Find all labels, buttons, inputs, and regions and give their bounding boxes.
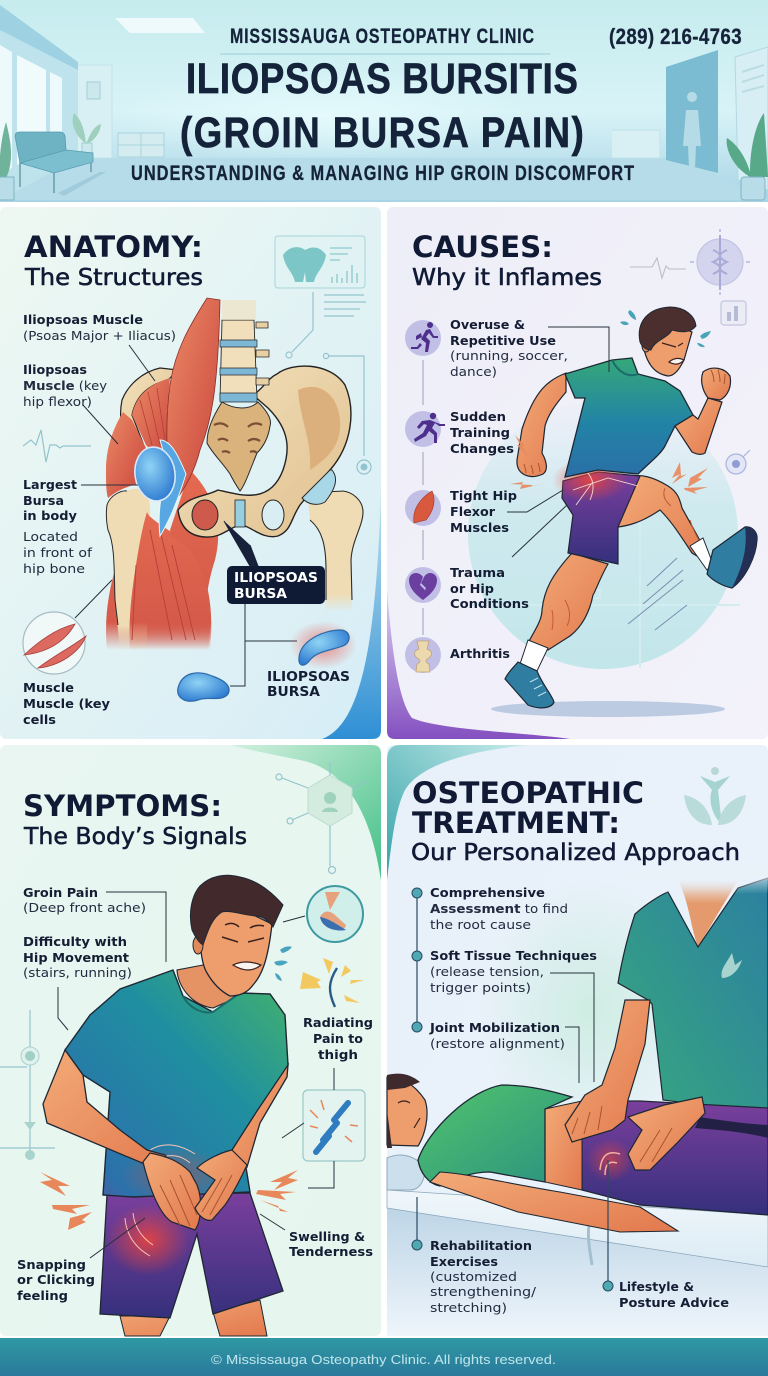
label: sudden training: Training <box>450 425 510 440</box>
illustration: treatment table <box>387 1155 768 1336</box>
label: muscle cells: Muscle (key <box>23 696 110 711</box>
label: iliopsoas muscle <box>23 312 176 343</box>
label: overuse: dance) <box>450 364 497 379</box>
label: muscle cells <box>23 680 110 727</box>
hand left <box>143 1153 201 1230</box>
label: muscle cells: Muscle <box>23 680 74 695</box>
icon: joint <box>414 641 432 672</box>
heading: causes <box>412 230 602 291</box>
label: rehabilitation: Rehabilitation <box>430 1238 532 1253</box>
icon: foot circle <box>283 886 363 942</box>
heading: anatomy <box>24 230 203 291</box>
label: rehabilitation: strengthening/ <box>430 1284 537 1299</box>
subtitle: UNDERSTANDING & MANAGING HIP GROIN DISCOMFORT <box>131 161 635 184</box>
heading: treatment <box>411 776 740 866</box>
label: soft tissue: (release tension, <box>430 964 544 979</box>
icon: bursa small <box>178 673 229 701</box>
label: radiating pain: Pain to <box>313 1031 363 1046</box>
label: radiating pain: Radiating <box>303 1015 373 1030</box>
label: soft tissue: trigger points) <box>430 980 531 995</box>
heading: symptoms <box>23 789 247 850</box>
heading: treatment: OSTEOPATHIC <box>412 776 644 810</box>
shorts <box>100 1193 283 1318</box>
shirt <box>65 970 288 1197</box>
label: tight hip flexor <box>450 488 517 535</box>
therapist second hand <box>628 1097 705 1170</box>
treatment timeline and callouts <box>412 888 613 1291</box>
title: (GROIN BURSA PAIN) <box>180 109 584 157</box>
left ilium rim <box>121 368 178 455</box>
icon: joint box <box>303 1090 365 1161</box>
label: soft tissue: Soft Tissue Techniques <box>430 948 597 963</box>
label: hip movement: Difficulty with <box>23 934 127 949</box>
wall cabinet and picture <box>87 82 164 157</box>
causes callouts <box>507 327 609 557</box>
label: rehabilitation: stretching) <box>430 1300 507 1315</box>
panel: treatment <box>387 745 768 1336</box>
label: sudden training: Changes <box>450 441 514 456</box>
label: swelling: Swelling & <box>289 1229 365 1244</box>
back leg <box>528 553 608 650</box>
label: lifestyle: Lifestyle & <box>619 1279 694 1294</box>
clinic name: MISSISSAUGA OSTEOPATHY CLINIC <box>230 24 534 48</box>
label: iliopsoas muscle: Iliopsoas Muscle <box>23 312 143 327</box>
illustration: man in pain <box>40 875 298 1336</box>
label: largest bursa: Bursa <box>23 493 64 508</box>
pelvis <box>178 366 351 537</box>
neck <box>177 965 253 1008</box>
icon: chart <box>721 301 746 325</box>
callout: iliopsoas bursa: ILIOPSOAS <box>234 571 318 586</box>
label: iliopsoas bursa: ILIOPSOAS <box>267 670 350 685</box>
illustration: patient <box>387 1000 768 1232</box>
muscle lines <box>129 345 155 381</box>
panel: symptoms <box>0 745 381 1336</box>
label: assessment: Assessment to find <box>430 901 568 916</box>
label: groin pain <box>23 885 146 915</box>
label: swelling <box>289 1229 373 1259</box>
label: snapping: or Clicking <box>17 1272 95 1287</box>
back arm <box>517 373 566 476</box>
left femur <box>106 489 150 650</box>
icon: radiating pain <box>300 958 364 1007</box>
bursa <box>159 440 186 536</box>
title: ILIOPSOAS BURSITIS <box>186 55 578 103</box>
icon column: causes <box>405 320 445 673</box>
label: soft tissue <box>430 948 597 995</box>
label: overuse: Repetitive Use <box>450 333 556 348</box>
panel: header clinic background <box>0 0 768 202</box>
label: lifestyle: Posture Advice <box>619 1295 729 1310</box>
label: trauma <box>450 565 529 611</box>
heading: treatment: TREATMENT: <box>412 806 620 840</box>
label: rehabilitation: (customized <box>430 1269 517 1284</box>
arm left <box>43 1050 175 1170</box>
iliacus <box>132 378 170 470</box>
label: largest bursa: Located <box>23 529 78 544</box>
therapist arm and hand <box>565 1000 650 1142</box>
label: sudden training <box>450 409 514 456</box>
label: snapping: Snapping <box>17 1257 86 1272</box>
label: hip movement: (stairs, running) <box>23 965 132 980</box>
header rule <box>220 53 550 55</box>
label: assessment <box>430 885 568 932</box>
label: assessment: the root cause <box>430 917 531 932</box>
label: snapping <box>17 1257 95 1303</box>
footer: © Mississauga Osteopathy Clinic. All rights reserved. <box>211 1352 556 1367</box>
label: hip flexor: Iliopsoas <box>23 362 87 377</box>
label: trauma: or Hip <box>450 581 494 596</box>
head <box>643 320 692 376</box>
arm right <box>232 1065 288 1167</box>
label: largest bursa: in front of <box>23 545 93 560</box>
label: rehabilitation <box>430 1238 537 1315</box>
label: iliopsoas bursa: BURSA <box>267 685 320 700</box>
icon: caduceus emblem <box>690 229 750 295</box>
phone number: (289) 216-4763 <box>609 26 742 49</box>
label: hip flexor: Muscle (key <box>23 378 108 393</box>
label: sudden training: Sudden <box>450 409 506 424</box>
bolts <box>40 1170 298 1230</box>
label: joint mobilization: Joint Mobilization <box>429 1020 560 1035</box>
label: swelling: Tenderness <box>289 1244 373 1259</box>
label: arthritis: Arthritis <box>450 646 510 661</box>
label: radiating pain: thigh <box>318 1047 358 1062</box>
illustration: anatomy <box>75 298 363 686</box>
footer <box>0 1338 768 1376</box>
bolts <box>510 435 708 494</box>
title <box>180 55 584 157</box>
label: hip flexor <box>23 362 108 409</box>
label: largest bursa: hip bone <box>23 561 85 576</box>
icon: target <box>726 450 750 474</box>
panel: anatomy <box>0 207 381 739</box>
label: groin pain: (Deep front ache) <box>23 900 146 915</box>
hand right <box>195 1150 247 1220</box>
spine <box>220 320 257 400</box>
label: iliopsoas muscle: (Psoas Major + Iliacus) <box>23 328 176 343</box>
label: joint mobilization <box>429 1020 565 1051</box>
head <box>200 905 272 996</box>
panel: causes <box>387 207 768 739</box>
label: assessment: Comprehensive <box>430 885 545 900</box>
icon: runner <box>411 322 438 352</box>
label: tight hip flexor: Flexor <box>450 504 496 519</box>
heading: causes: Why it Inflames <box>412 265 602 291</box>
icon: muscle <box>414 491 434 523</box>
label: hip movement: Hip Movement <box>23 950 129 965</box>
label: overuse: (running, soccer, <box>450 348 568 363</box>
icon: pelvis monitor <box>275 236 365 288</box>
label: trauma: Trauma <box>450 565 505 580</box>
label: groin pain: Groin Pain <box>23 885 98 900</box>
label: tight hip flexor: Muscles <box>450 520 509 535</box>
label: hip movement <box>23 934 132 980</box>
psoas band <box>167 298 220 503</box>
heading: symptoms: The Body’s Signals <box>23 824 247 850</box>
heading: anatomy: The Structures <box>24 265 203 291</box>
legs <box>120 1300 267 1336</box>
label: iliopsoas bursa <box>267 670 350 700</box>
label: joint mobilization: (restore alignment) <box>430 1036 565 1051</box>
illustration: therapist <box>618 868 768 1122</box>
symptom callouts <box>58 892 334 1258</box>
label: rehabilitation: Exercises <box>430 1254 498 1269</box>
label: tight hip flexor: Tight Hip <box>450 488 517 503</box>
label: largest bursa: Largest <box>23 477 77 492</box>
label: largest bursa: in body <box>23 508 77 523</box>
icon: bursa inflamed <box>289 621 357 669</box>
heading: anatomy: ANATOMY: <box>24 230 203 264</box>
shirt <box>565 358 693 477</box>
label: trauma: Conditions <box>450 596 529 611</box>
label: snapping: feeling <box>17 1288 68 1303</box>
label: muscle cells: cells <box>23 712 56 727</box>
icon: broken heart <box>409 573 437 600</box>
label: lifestyle <box>619 1279 729 1310</box>
sacrum <box>207 402 270 491</box>
right femur <box>308 491 363 612</box>
callout: iliopsoas bursa <box>227 566 325 604</box>
shorts <box>562 472 640 564</box>
illustration: runner <box>505 307 757 708</box>
icon: sprinter <box>414 413 445 443</box>
icon: wellness logo <box>684 767 746 825</box>
label: overuse: Overuse & <box>450 317 525 332</box>
heading: treatment: Our Personalized Approach <box>411 840 740 866</box>
front arm <box>675 398 722 454</box>
label: overuse <box>450 317 568 379</box>
front leg <box>618 476 714 566</box>
icon: hex emblem <box>276 762 368 874</box>
label: radiating pain <box>303 1015 373 1062</box>
label: hip flexor: hip flexor) <box>23 394 92 409</box>
heading: causes: CAUSES: <box>412 230 553 264</box>
callout: iliopsoas bursa: BURSA <box>234 587 287 602</box>
heading: symptoms: SYMPTOMS: <box>23 789 222 823</box>
icon: muscle cells <box>23 612 86 674</box>
couch <box>15 132 106 196</box>
label: largest bursa <box>23 477 93 576</box>
